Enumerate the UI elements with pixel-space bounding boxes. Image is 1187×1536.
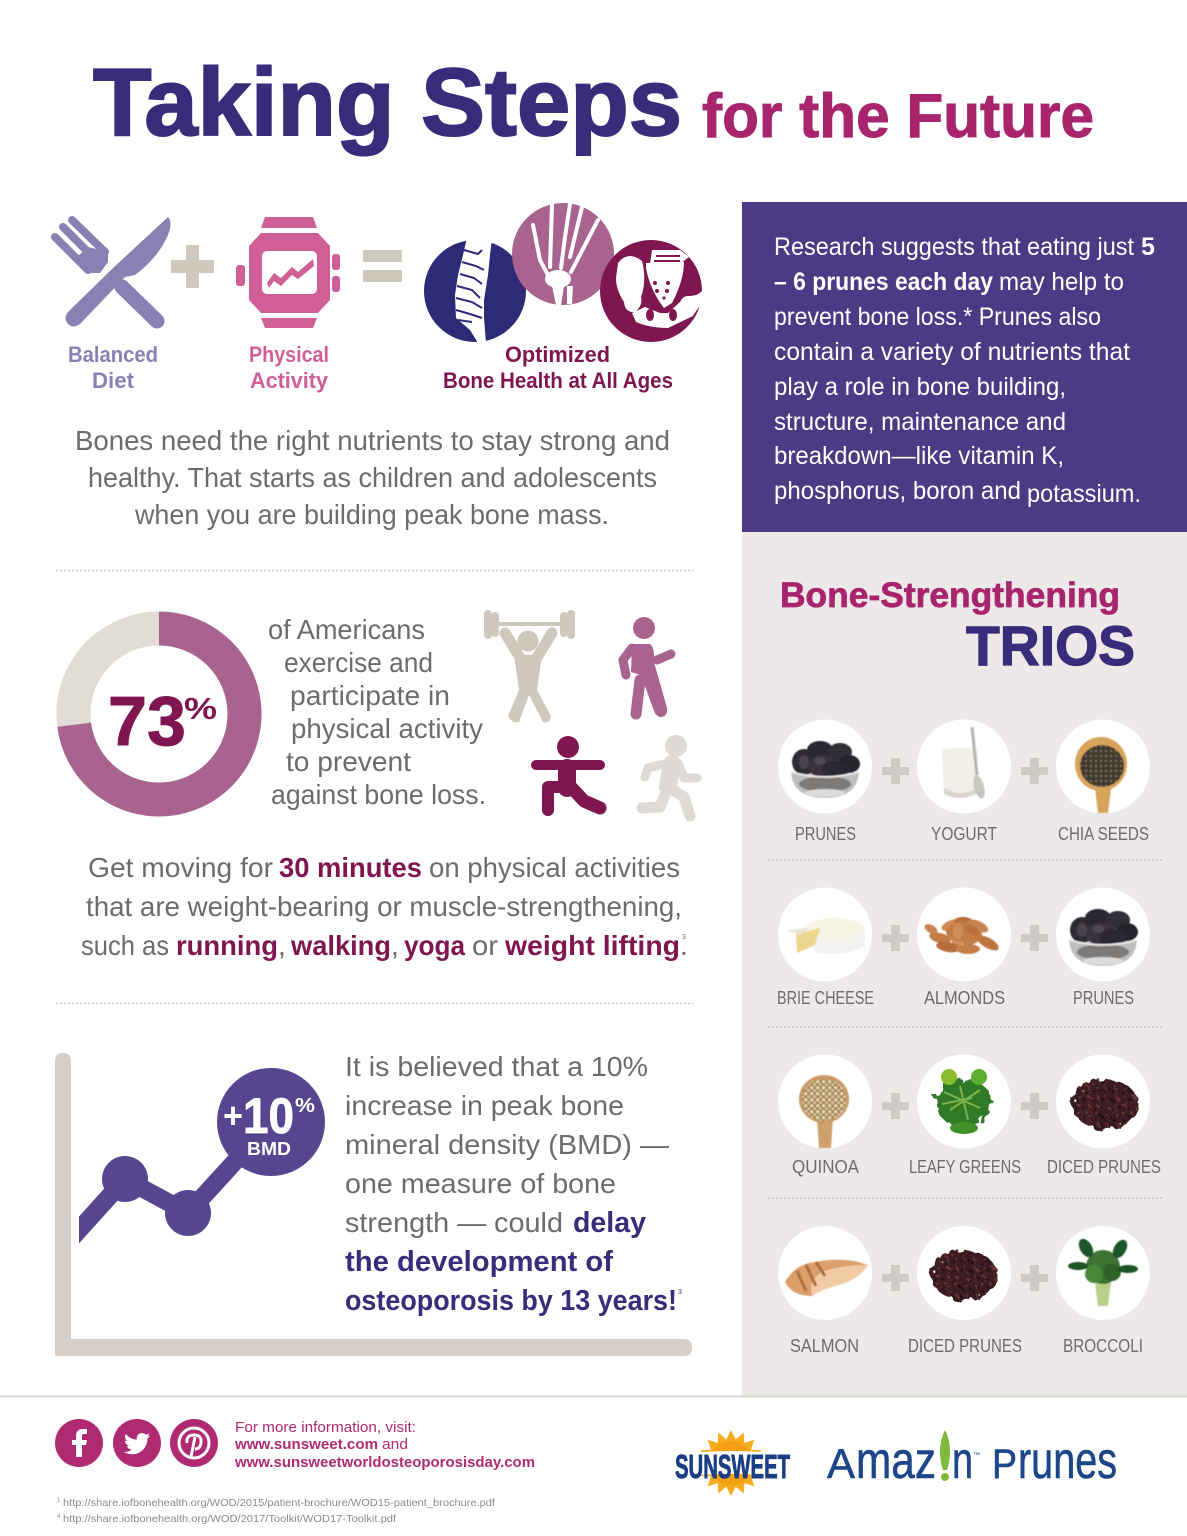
chart: bone density growth	[55, 1053, 692, 1356]
icon: spine circle	[424, 238, 526, 343]
panel: research callout: may help to	[999, 268, 1124, 296]
text: bmd explanation: 3	[678, 1289, 682, 1296]
row 4: salmon, diced prunes, broccoli	[778, 1226, 1150, 1356]
text: get moving: or	[472, 930, 498, 961]
icon: hand bones circle	[512, 203, 614, 305]
label: physical activity: Physical	[249, 342, 329, 367]
text: of americans exercise: participate in	[290, 680, 450, 711]
row 1: prunes, yogurt, chia seeds: YOGURT	[931, 824, 997, 844]
text: more information: www.sunsweet.com	[234, 1436, 378, 1453]
footnotes: http://share.iofbonehealth.org/WOD/2017/Toolkit/WOD17-Toolkit.pdf	[63, 1513, 396, 1525]
panel: research callout: phosphorus, boron and	[774, 477, 1021, 505]
panel: research callout: 5	[1141, 233, 1155, 261]
text: bmd explanation: osteoporosis by 13 years!	[345, 1285, 677, 1317]
text: bmd explanation: It is believed that a 10%	[345, 1051, 648, 1082]
logo: amaz!n prunes: n	[952, 1432, 973, 1490]
row 3: quinoa, leafy greens, diced prunes: DICED PRUNES	[1047, 1157, 1161, 1177]
logo: sunsweet	[674, 1429, 790, 1497]
text: of americans exercise: against bone loss.	[271, 779, 486, 810]
chart: bone density growth: 10	[243, 1088, 294, 1144]
footnotes: http://share.iofbonehealth.org/WOD/2015/patient-brochure/WOD15-patient_brochure.pdf	[63, 1497, 495, 1509]
label: physical activity	[249, 342, 329, 393]
label: balanced diet: Diet	[92, 368, 135, 393]
row 4: salmon, diced prunes, broccoli: BROCCOLI	[1063, 1336, 1143, 1356]
icon: runner	[642, 735, 697, 816]
text: get moving: .	[680, 930, 688, 961]
text: bmd explanation	[345, 1051, 682, 1317]
text: get moving: ,	[278, 930, 286, 961]
text: bmd explanation: the development of	[345, 1246, 613, 1278]
text: bmd explanation: delay	[573, 1207, 646, 1239]
logo: amaz!n prunes: P	[992, 1440, 1017, 1487]
icon: yoga figure	[536, 736, 600, 810]
text: of americans exercise: exercise and	[284, 647, 433, 678]
panel: research callout	[742, 202, 1187, 532]
text: get moving: on physical activities	[429, 852, 680, 883]
row 4: salmon, diced prunes, broccoli: SALMON	[790, 1336, 859, 1356]
panel: research callout: prevent bone loss.* Prunes also	[774, 303, 1101, 331]
text: get moving: such as	[81, 930, 169, 961]
heading: trios: Bone-Strengthening	[780, 576, 1120, 615]
text: bones need nutrients	[75, 425, 670, 530]
text: get moving	[81, 852, 688, 961]
chart: bone density growth: BMD	[247, 1139, 291, 1159]
panel: bone-strengthening trios	[742, 532, 1187, 1396]
logo: amaz!n prunes: maz	[856, 1432, 936, 1490]
footnotes	[57, 1497, 495, 1525]
icon: weightlifter	[488, 614, 571, 722]
footnotes: 4	[57, 1514, 61, 1520]
panel: research callout: structure, maintenance and	[774, 408, 1066, 436]
row 3: quinoa, leafy greens, diced prunes	[778, 1054, 1161, 1177]
row 2: brie cheese, almonds, prunes: BRIE CHEESE	[777, 988, 874, 1008]
text: get moving: yoga	[404, 930, 465, 961]
panel: research callout: breakdown—like vitamin K,	[774, 442, 1064, 470]
text: get moving: 30 minutes	[279, 852, 422, 883]
text: of americans exercise: physical activity	[291, 713, 483, 744]
row 4: salmon, diced prunes, broccoli: DICED PRUNES	[908, 1336, 1022, 1356]
icon: walker	[623, 617, 671, 717]
icon: fitness watch	[236, 217, 340, 328]
text: get moving: Get moving for	[88, 852, 273, 883]
label: optimized bone health: Optimized	[505, 342, 610, 367]
icon: pelvis circle	[600, 240, 703, 342]
label: optimized bone health	[443, 342, 673, 393]
text: get moving: 3	[682, 934, 686, 941]
row 1: prunes, yogurt, chia seeds: PRUNES	[795, 824, 856, 844]
row 1: prunes, yogurt, chia seeds: CHIA SEEDS	[1058, 824, 1149, 844]
footnotes: 1	[57, 1498, 61, 1504]
label: balanced diet	[68, 342, 158, 393]
label: optimized bone health: Bone Health at All Ages	[443, 368, 673, 393]
text: more information: www.sunsweetworldosteoporosisday.com	[234, 1454, 535, 1471]
chart: bone density growth: %	[295, 1095, 315, 1117]
text: bmd explanation: increase in peak bone	[345, 1090, 624, 1121]
heading: trios	[780, 576, 1135, 677]
row 2: brie cheese, almonds, prunes: PRUNES	[1073, 988, 1134, 1008]
text: of americans exercise: to prevent	[286, 746, 411, 777]
chart: bone density growth: +	[223, 1095, 243, 1136]
row 2: brie cheese, almonds, prunes: ALMONDS	[924, 988, 1005, 1008]
panel: research callout: potassium.	[1027, 480, 1141, 508]
title: Taking Steps	[93, 49, 682, 156]
text: get moving: that are weight-bearing or muscle-strengthening,	[86, 891, 682, 922]
panel: research callout: Research suggests that eating just	[774, 233, 1134, 261]
text: get moving: ,	[391, 930, 399, 961]
panel: research callout: – 6 prunes each day	[774, 268, 993, 296]
label: balanced diet: Balanced	[68, 342, 158, 367]
row 3: quinoa, leafy greens, diced prunes: LEAFY GREENS	[909, 1157, 1021, 1177]
text: of americans exercise: of Americans	[268, 614, 425, 645]
donut chart: 73%: %	[184, 691, 217, 726]
row 3: quinoa, leafy greens, diced prunes: QUINOA	[792, 1157, 859, 1177]
text: of americans exercise	[268, 614, 486, 810]
logo: amaz!n prunes: runes	[1018, 1432, 1117, 1490]
icon: pinterest	[170, 1419, 218, 1467]
donut chart: 73%	[74, 628, 245, 800]
text: bmd explanation: strength — could	[345, 1207, 563, 1238]
text: bones need nutrients: when you are building peak bone mass.	[134, 499, 609, 530]
icon: twitter	[113, 1419, 161, 1467]
title: for the Future	[702, 82, 1094, 151]
icon: facebook	[55, 1419, 103, 1467]
text: get moving: weight lifting	[504, 930, 680, 961]
equation: diet + activity = bone health	[55, 203, 703, 393]
text: get moving: running	[176, 930, 278, 961]
text: bones need nutrients: Bones need the right nutrients to stay strong and	[75, 425, 670, 456]
donut chart: 73%: 73	[108, 682, 186, 760]
heading: trios: TRIOS	[966, 614, 1135, 677]
label: physical activity: Activity	[250, 368, 329, 393]
text: get moving: walking	[290, 930, 391, 961]
panel: research callout: play a role in bone building,	[774, 373, 1066, 401]
text: more information: and	[382, 1436, 408, 1453]
equals sign	[363, 250, 402, 282]
text: bones need nutrients: healthy. That starts as children and adolescents	[88, 462, 657, 493]
text: more information: For more information, visit:	[235, 1419, 416, 1436]
logo: amaz!n prunes	[827, 1430, 1117, 1490]
row 1: prunes, yogurt, chia seeds	[778, 720, 1150, 844]
text: bmd explanation: one measure of bone	[345, 1168, 616, 1199]
social icons	[55, 1419, 218, 1467]
logo: amaz!n prunes: ™	[973, 1452, 980, 1459]
text: more information	[234, 1419, 535, 1471]
text: bmd explanation: mineral density (BMD) —	[345, 1129, 669, 1160]
title	[93, 49, 1094, 156]
panel: research callout: contain a variety of nutrients that	[774, 338, 1130, 366]
icon: fork and knife	[55, 217, 170, 326]
logo: amaz!n prunes: A	[827, 1440, 855, 1487]
logo: sunsweet: SUNSWEET	[675, 1448, 790, 1485]
row 2: brie cheese, almonds, prunes	[777, 888, 1150, 1008]
plus sign	[171, 245, 214, 288]
